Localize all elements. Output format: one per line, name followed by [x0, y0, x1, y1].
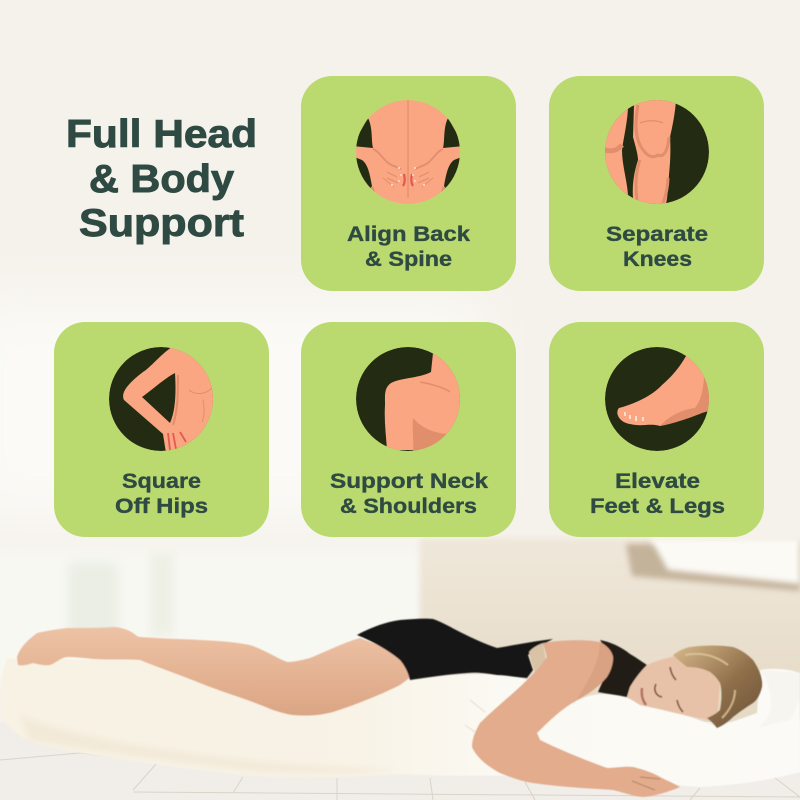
label: Off Hips	[115, 495, 208, 518]
icon: shoulder	[356, 345, 465, 452]
arm shading	[577, 642, 613, 700]
heading: Full Head & Body Support: & Body	[89, 158, 234, 201]
fingers	[632, 777, 660, 790]
heading: Full Head & Body Support: Support	[79, 202, 244, 245]
sleeping woman	[17, 619, 762, 797]
arm and hand	[472, 640, 680, 797]
label: Support Neck	[330, 470, 488, 493]
label	[330, 470, 488, 518]
heading: Full Head & Body Support: Full Head	[66, 113, 257, 156]
panel: square off hips	[54, 322, 269, 537]
heading: Full Head & Body Support	[66, 113, 257, 245]
label: Elevate	[615, 470, 700, 493]
panel: separate knees	[549, 76, 764, 291]
panel: support neck and shoulders	[301, 322, 516, 537]
mattress	[0, 722, 800, 800]
face	[627, 655, 720, 723]
icon: foot	[605, 347, 712, 451]
panel: elevate feet and legs	[549, 322, 764, 537]
black shorts and top	[357, 619, 553, 680]
hair highlights	[685, 654, 735, 718]
closed eyes and nose	[655, 667, 683, 712]
hair	[673, 646, 762, 728]
icon: knees	[600, 100, 709, 204]
label	[347, 223, 470, 271]
black top at chest	[598, 640, 647, 697]
icon: lower back with hands	[356, 100, 460, 204]
fingernails	[391, 168, 425, 185]
label: Knees	[623, 248, 692, 271]
leg and foot	[17, 627, 412, 716]
icon: arm on hip	[109, 345, 220, 453]
body pillow	[1, 658, 800, 787]
pillow lower shading	[20, 716, 400, 773]
label	[590, 470, 725, 518]
label: Feet & Legs	[590, 495, 725, 518]
label: Square	[122, 470, 201, 493]
label: Separate	[606, 223, 708, 246]
label: & Spine	[365, 248, 452, 271]
panel: align back and spine	[301, 76, 516, 291]
label	[115, 470, 208, 518]
lips	[642, 688, 646, 705]
label	[606, 223, 708, 271]
label: Align Back	[347, 223, 470, 246]
shoulder strap patch	[529, 643, 547, 672]
label: & Shoulders	[340, 495, 477, 518]
